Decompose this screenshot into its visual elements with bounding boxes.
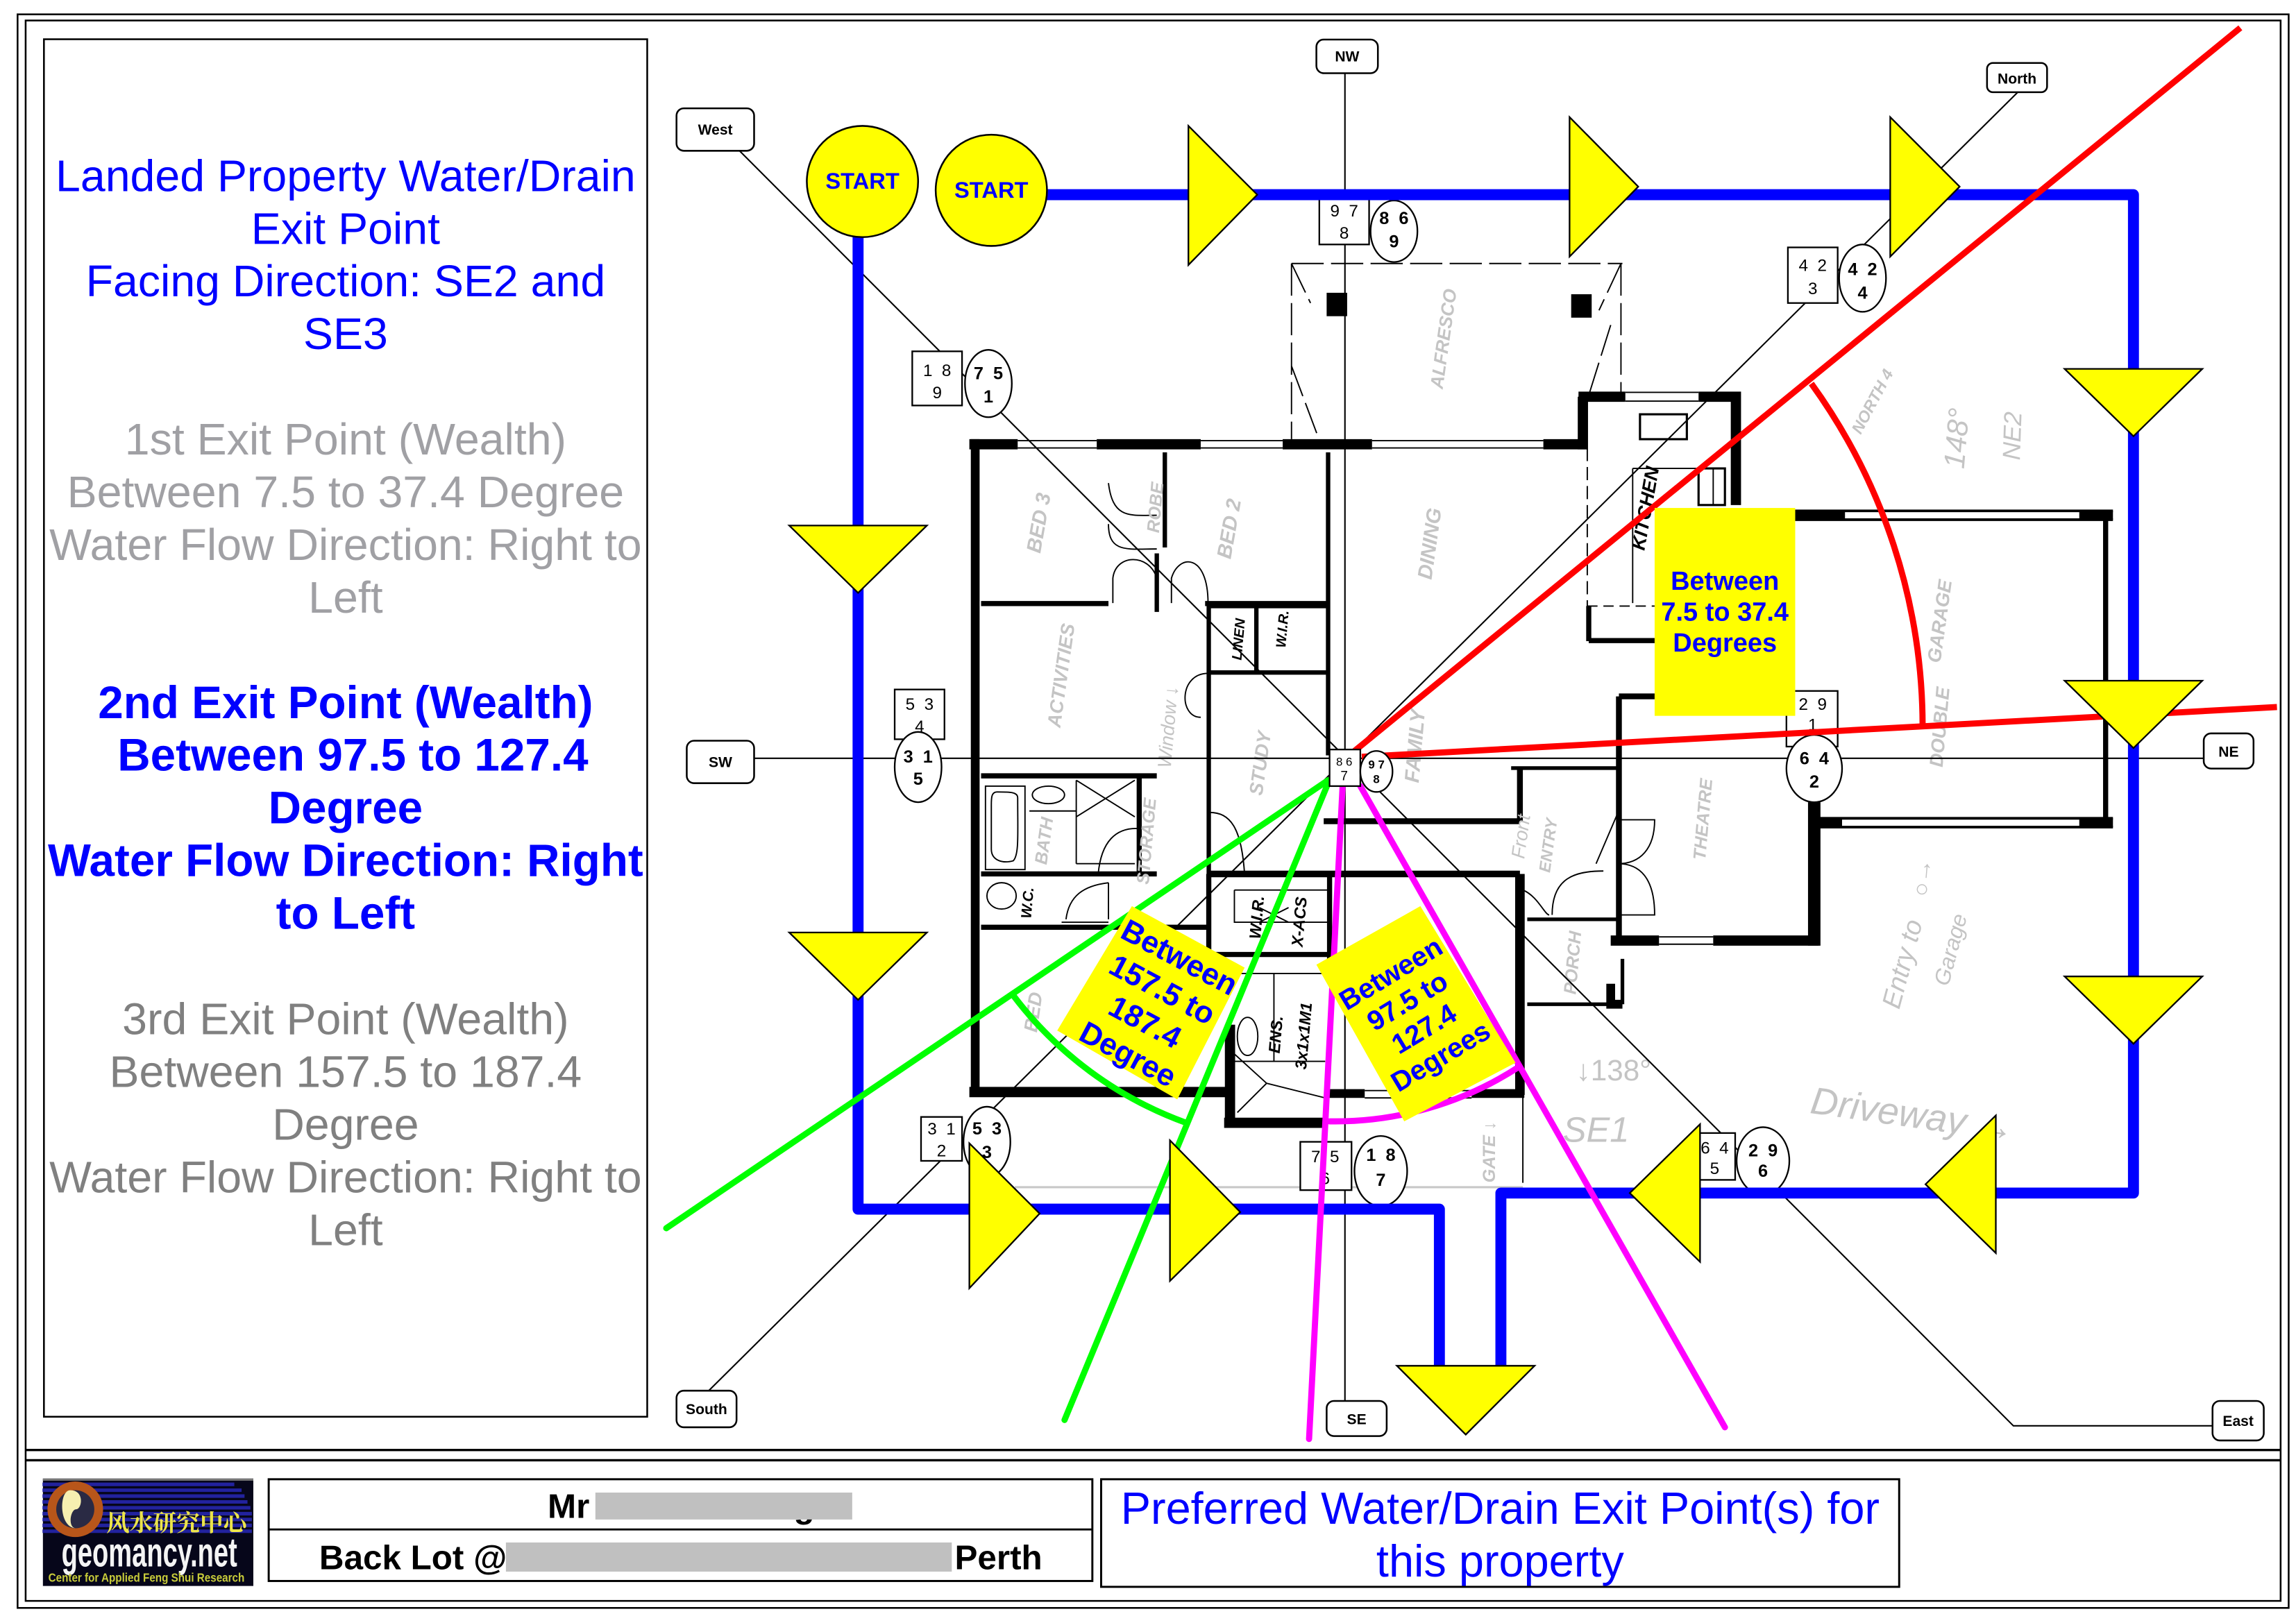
floor plan: ○→ — [1907, 858, 1937, 897]
number chart: North — [1788, 244, 1886, 312]
number chart: NW: 9 7 — [1330, 202, 1358, 221]
floor plan: W.I.R. — [1274, 610, 1292, 649]
floor plan: NE2 — [1998, 411, 2027, 461]
floor plan: FAMILY — [1401, 707, 1430, 783]
title box: preferred exit points: this property — [1376, 1536, 1624, 1586]
callout: 7.5 to 37.4 degrees: Degrees — [1673, 629, 1777, 658]
number chart: East: 6 4 — [1700, 1139, 1729, 1157]
title table: client and address: g — [793, 1488, 815, 1526]
floor plan: STORAGE — [1133, 797, 1160, 885]
direction labels: West — [698, 122, 733, 138]
heading: property title: SE3 — [303, 309, 388, 359]
compass lines — [709, 73, 2213, 1426]
text block: 2nd exit point: to Left — [276, 888, 415, 939]
number chart: South: 3 — [982, 1143, 992, 1162]
text block: 1st exit point: Left — [308, 572, 383, 622]
direction labels: South — [686, 1402, 727, 1418]
number chart: SW: 4 — [915, 717, 925, 736]
number chart: NE: 2 — [1809, 772, 1819, 792]
floor plan: Front — [1507, 812, 1535, 860]
floor plan: Driveway → — [1808, 1078, 2017, 1150]
number chart: North: 3 — [1808, 280, 1818, 298]
direction labels — [677, 40, 2264, 1441]
callout: 97.5 to 127.4 degrees — [1317, 906, 1516, 1121]
number chart: SW: 3 1 — [904, 747, 933, 767]
number chart: North: 4 — [1857, 283, 1868, 303]
floor plan: ACTIVITIES — [1043, 622, 1079, 729]
floor plan: ALFRESCO — [1426, 287, 1461, 391]
floor plan: KITCHEN — [1628, 464, 1663, 552]
floor plan: ENTRY — [1535, 815, 1561, 874]
number chart: South: 5 3 — [972, 1119, 1002, 1139]
number chart: center: 7 — [1340, 769, 1348, 783]
floor plan: ENS. — [1265, 1015, 1286, 1054]
number chart: center: 8 — [1373, 773, 1380, 786]
magenta sector: 97.5 to 127.4 degrees — [1309, 783, 1725, 1439]
number chart: SW: 5 3 — [906, 695, 934, 714]
floor plan: LINEN — [1230, 618, 1249, 661]
number chart: East: 5 — [1710, 1159, 1719, 1178]
floor plan: GARAGE — [1923, 578, 1956, 664]
number chart: East: 6 — [1758, 1162, 1768, 1181]
text block: 1st exit point: Between 7.5 to 37.4 Degree — [67, 467, 624, 517]
icon: start circle left — [807, 126, 918, 237]
heading: property title: Landed Property Water/Drain — [56, 151, 636, 201]
direction labels: East — [2222, 1413, 2254, 1429]
floor plan: BED — [1020, 991, 1047, 1033]
title table: client and address — [269, 1479, 1092, 1581]
number chart: center: 8 6 — [1336, 755, 1352, 768]
number chart: NE: 2 9 — [1799, 695, 1827, 714]
floor plan: X-ACS — [1288, 896, 1310, 949]
number chart: SW — [895, 690, 945, 802]
green sector: 157.5 to 187.4 degrees — [666, 780, 1328, 1420]
floor plan: THEATRE — [1690, 777, 1716, 861]
text block: 3rd exit point: Degree — [272, 1099, 419, 1149]
callout: 7.5 to 37.4 degrees: Between — [1671, 567, 1779, 596]
floor plan: Entry to — [1877, 917, 1929, 1012]
title table: client and address: Back Lot @ — [319, 1539, 507, 1577]
callout: 157.5 to 187.4 degree: Between — [1115, 913, 1243, 1003]
callout: 97.5 to 127.4 degrees: Degrees — [1386, 1015, 1496, 1098]
callout: 97.5 to 127.4 degrees: Between — [1334, 931, 1448, 1017]
floor plan: SE1 — [1563, 1110, 1629, 1150]
callout: 157.5 to 187.4 degree — [1057, 906, 1244, 1099]
floor plan: NORTH 4 — [1848, 366, 1897, 436]
number chart: West: 1 8 — [923, 362, 951, 380]
callout: 157.5 to 187.4 degree: 157.5 to — [1104, 948, 1221, 1032]
number chart: South: 3 1 — [927, 1120, 956, 1139]
number chart: center — [1330, 749, 1392, 792]
text block: 2nd exit point: Degree — [269, 783, 423, 833]
direction labels: NW — [1335, 49, 1360, 65]
callout: 157.5 to 187.4 degree: Degree — [1074, 1015, 1182, 1094]
number chart: NW: 8 6 — [1379, 209, 1409, 228]
icon: start circle top: START — [954, 177, 1029, 203]
number chart: East: 2 9 — [1748, 1141, 1778, 1161]
heading: property title: Facing Direction: SE2 and — [86, 256, 605, 306]
floor plan: Garage — [1929, 911, 1972, 988]
number chart: North: 4 2 — [1848, 260, 1877, 280]
logo: geomancy.net: 风水研究中心 — [106, 1504, 250, 1538]
direction labels: SE — [1347, 1412, 1367, 1428]
logo: geomancy.net — [42, 1479, 253, 1586]
icon: start circle left: START — [825, 168, 900, 194]
title box: preferred exit points: Preferred Water/Drain Exit Point(s) for — [1121, 1483, 1880, 1533]
callout: 7.5 to 37.4 degrees — [1655, 508, 1795, 716]
floor plan: 3x1x1M1 — [1292, 1002, 1315, 1070]
water route: blue pipe — [858, 190, 2134, 1369]
number chart: SW: 5 — [913, 770, 923, 789]
number chart: NW — [1319, 199, 1417, 262]
logo: geomancy.net: geomancy.net — [62, 1529, 237, 1575]
floor plan — [970, 264, 2113, 1187]
flow arrows — [789, 117, 2202, 1434]
text block: 1st exit point: Water Flow Direction: Right to — [49, 520, 642, 570]
number chart: South: 2 — [937, 1142, 946, 1161]
floor plan: ↓138° — [1576, 1054, 1651, 1087]
floor plan: 148° — [1938, 407, 1975, 470]
direction labels: SW — [709, 754, 732, 770]
direction labels: NE — [2218, 745, 2239, 760]
text block: 3rd exit point: Between 157.5 to 187.4 — [110, 1046, 582, 1096]
title box: preferred exit points — [1101, 1479, 1899, 1587]
callout: 157.5 to 187.4 degree: 187.4 — [1103, 989, 1187, 1055]
text block: 2nd exit point: Between 97.5 to 127.4 — [117, 730, 589, 781]
number chart: NE: 1 — [1808, 716, 1818, 735]
number chart: SE — [1300, 1136, 1407, 1206]
red sector: 7.5 to 37.4 degrees — [1354, 28, 2277, 757]
heading: property title: Exit Point — [251, 203, 440, 253]
number chart: North: 4 2 — [1799, 256, 1827, 275]
text block: 3rd exit point: 3rd Exit Point (Wealth) — [122, 994, 569, 1044]
text block: 2nd exit point: 2nd Exit Point (Wealth) — [98, 677, 593, 728]
floor plan: BED 3 — [1022, 491, 1056, 554]
number chart: NE — [1787, 691, 1842, 802]
text block: 1st exit point: 1st Exit Point (Wealth) — [125, 414, 566, 464]
number chart: center: 9 7 — [1368, 758, 1385, 772]
callout: 97.5 to 127.4 degrees: 97.5 to — [1362, 966, 1453, 1037]
logo: geomancy.net: Center for Applied Feng Shui Research — [49, 1571, 244, 1585]
number chart: SE: 7 5 — [1311, 1148, 1339, 1166]
direction labels: North — [1998, 71, 2036, 87]
number chart: West: 9 — [932, 384, 942, 402]
number chart: East — [1698, 1127, 1789, 1194]
number chart: South — [921, 1107, 1011, 1177]
floor plan: Window ↓ — [1154, 685, 1182, 769]
callout: 7.5 to 37.4 degrees: 7.5 to 37.4 — [1661, 598, 1789, 627]
floor plan: PORCH — [1560, 930, 1585, 995]
floor plan: ROBE — [1144, 481, 1167, 534]
number chart: West: 7 5 — [974, 364, 1003, 383]
number chart: SE: 6 — [1321, 1170, 1330, 1189]
title table: client and address: Perth — [955, 1539, 1043, 1577]
number chart: SE: 1 8 — [1366, 1146, 1396, 1165]
number chart: NW: 9 — [1389, 232, 1399, 252]
number chart: NE: 6 4 — [1800, 749, 1829, 768]
icon: start circle top — [936, 135, 1047, 246]
text block: 3rd exit point: Water Flow Direction: Right to — [49, 1152, 642, 1202]
title table: client and address: Mr — [548, 1488, 589, 1526]
number chart: West: 1 — [984, 387, 993, 407]
floor plan: STUDY — [1245, 728, 1276, 797]
number chart: NW: 8 — [1340, 224, 1349, 243]
floor plan: W.C. — [1018, 887, 1037, 919]
text block: 2nd exit point: Water Flow Direction: Right — [48, 835, 643, 886]
floor plan: GATE ↓ — [1480, 1121, 1499, 1182]
floor plan: BED 2 — [1213, 497, 1246, 561]
text block: 3rd exit point: Left — [308, 1205, 383, 1255]
floor plan: BATH — [1031, 815, 1057, 866]
floor plan: W.I.R. — [1246, 895, 1267, 940]
number chart: West — [912, 350, 1012, 417]
number chart: SE: 7 — [1376, 1171, 1385, 1190]
panel: description — [44, 40, 647, 1417]
callout: 97.5 to 127.4 degrees: 127.4 — [1387, 998, 1462, 1060]
floor plan: DOUBLE — [1925, 686, 1954, 768]
floor plan: DINING — [1414, 507, 1446, 581]
